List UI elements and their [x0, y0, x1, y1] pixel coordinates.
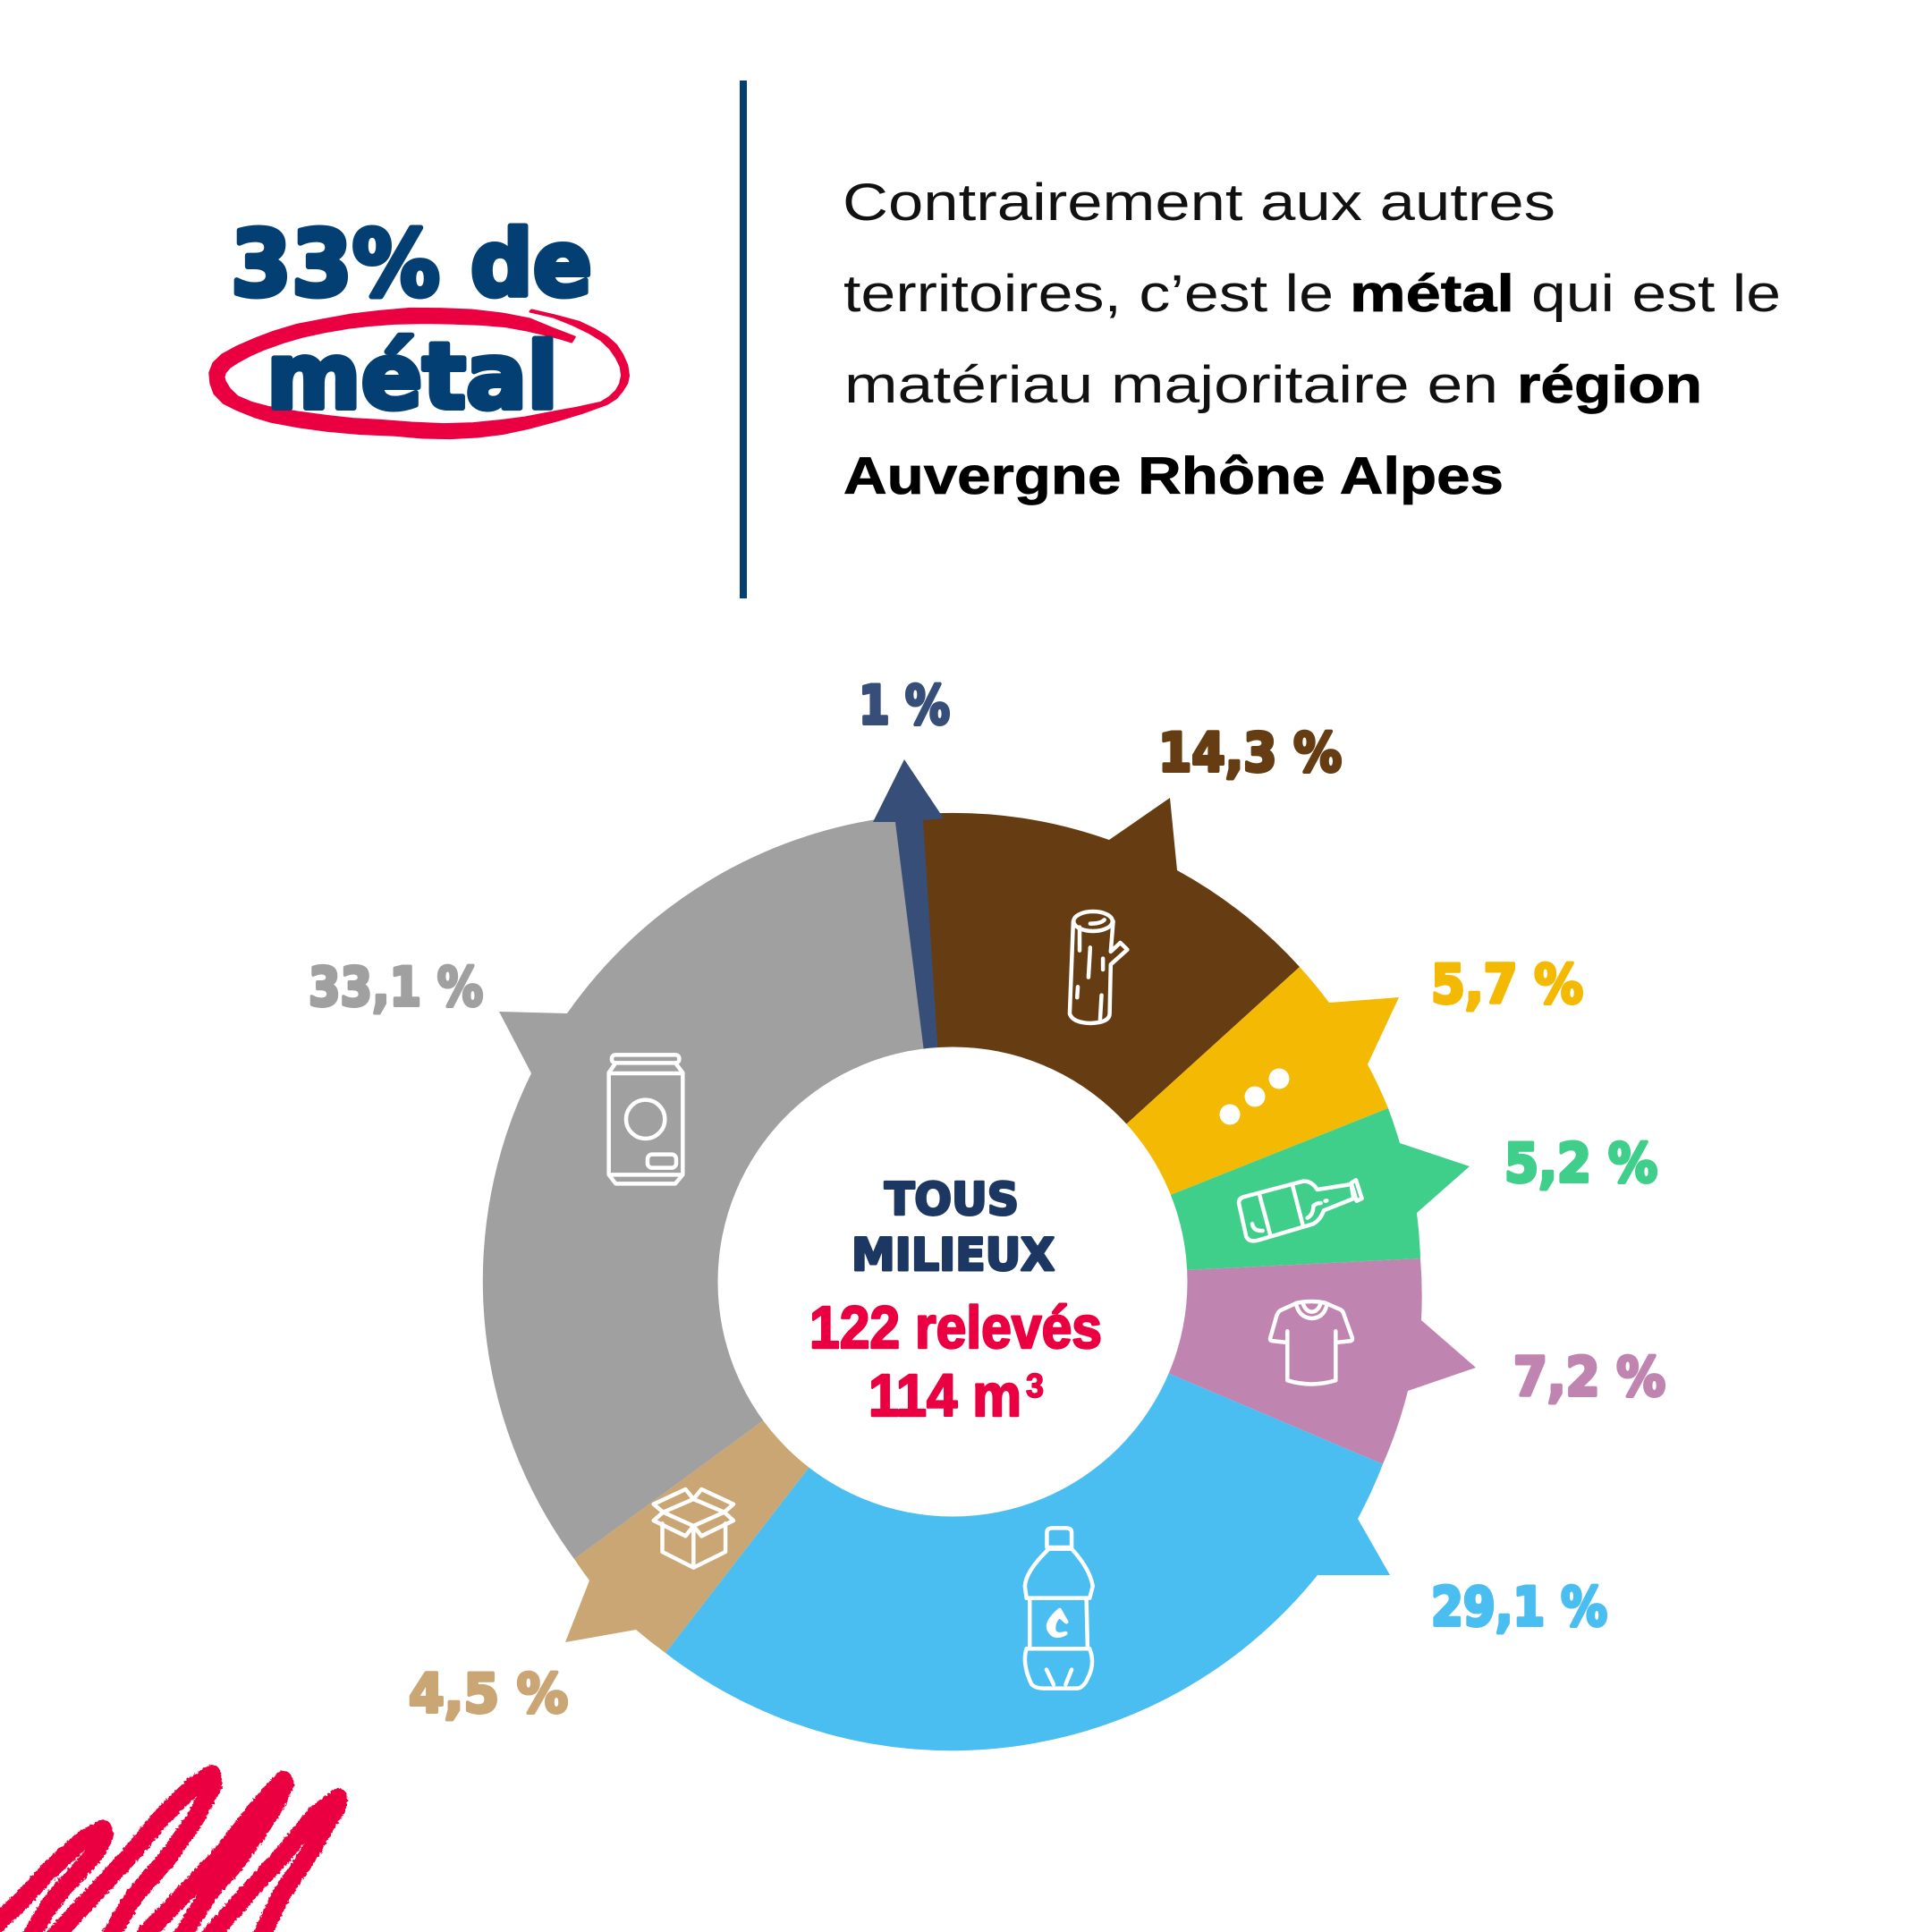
center figures — [809, 1294, 1102, 1429]
heading line 2: métal — [267, 324, 558, 430]
slice: 1% arrow — [873, 759, 953, 1282]
percentage labels — [309, 674, 1665, 1725]
icon: plastic bottle — [1025, 1528, 1093, 1689]
slice: metal 33.1% — [483, 817, 953, 1559]
line 2: métal — [1350, 265, 1514, 323]
hand-drawn red ellipse around métal — [209, 309, 629, 438]
heading line 1: 33% de — [231, 211, 592, 318]
donut chart: tous milieux — [483, 759, 1476, 1750]
slice: cardboard 4.5% — [565, 1282, 953, 1653]
center heading: MILIEUX — [852, 1229, 1055, 1281]
text block: explanation — [843, 174, 1781, 505]
icon: can — [609, 1055, 682, 1183]
slice: plastic 29.1% — [665, 1282, 1390, 1750]
decorative red scribble — [0, 1774, 338, 1932]
line 3: région — [1517, 356, 1702, 414]
icon: glass bottle — [1239, 1180, 1362, 1241]
center figures: 3 — [1026, 1368, 1044, 1405]
label 5,7 %: 5,7 % — [1431, 953, 1583, 1016]
icon: t-shirt — [1270, 1301, 1352, 1384]
center heading: TOUS — [885, 1174, 1019, 1225]
line 3: matériau majoritaire en — [844, 356, 1498, 414]
slice: other 5.7% — [953, 967, 1399, 1282]
icon: log — [1070, 911, 1127, 1023]
center figures: 114 m — [869, 1362, 1021, 1429]
slice: glass 5.2% — [953, 1108, 1470, 1282]
icon: three dots — [1220, 1068, 1290, 1125]
center heading — [852, 1174, 1055, 1281]
label 4,5 %: 4,5 % — [409, 1663, 568, 1725]
label 5,2 %: 5,2 % — [1504, 1132, 1657, 1195]
center hole — [717, 1046, 1188, 1517]
label 33,1 %: 33,1 % — [309, 956, 483, 1019]
vertical divider — [740, 80, 747, 598]
line 4: Auvergne Rhône Alpes — [843, 447, 1504, 505]
icon: cardboard box — [654, 1489, 733, 1568]
label 29,1 %: 29,1 % — [1431, 1576, 1607, 1639]
center label — [809, 1174, 1102, 1429]
line 3 — [844, 356, 1702, 414]
label 14,3 %: 14,3 % — [1158, 722, 1342, 784]
label 7,2 %: 7,2 % — [1513, 1346, 1665, 1409]
line 2: qui est le — [1531, 265, 1781, 323]
line 2: territoires, c’est le — [843, 265, 1334, 323]
line 2 — [843, 265, 1781, 323]
slice: textile 7.2% — [953, 1258, 1476, 1464]
center figures: 122 relevés — [809, 1294, 1102, 1361]
line 1: Contrairement aux autres — [843, 174, 1555, 232]
heading: 33% de métal — [209, 211, 629, 438]
label 1 %: 1 % — [859, 674, 950, 737]
slice: wood 14.3% — [922, 798, 1300, 1282]
